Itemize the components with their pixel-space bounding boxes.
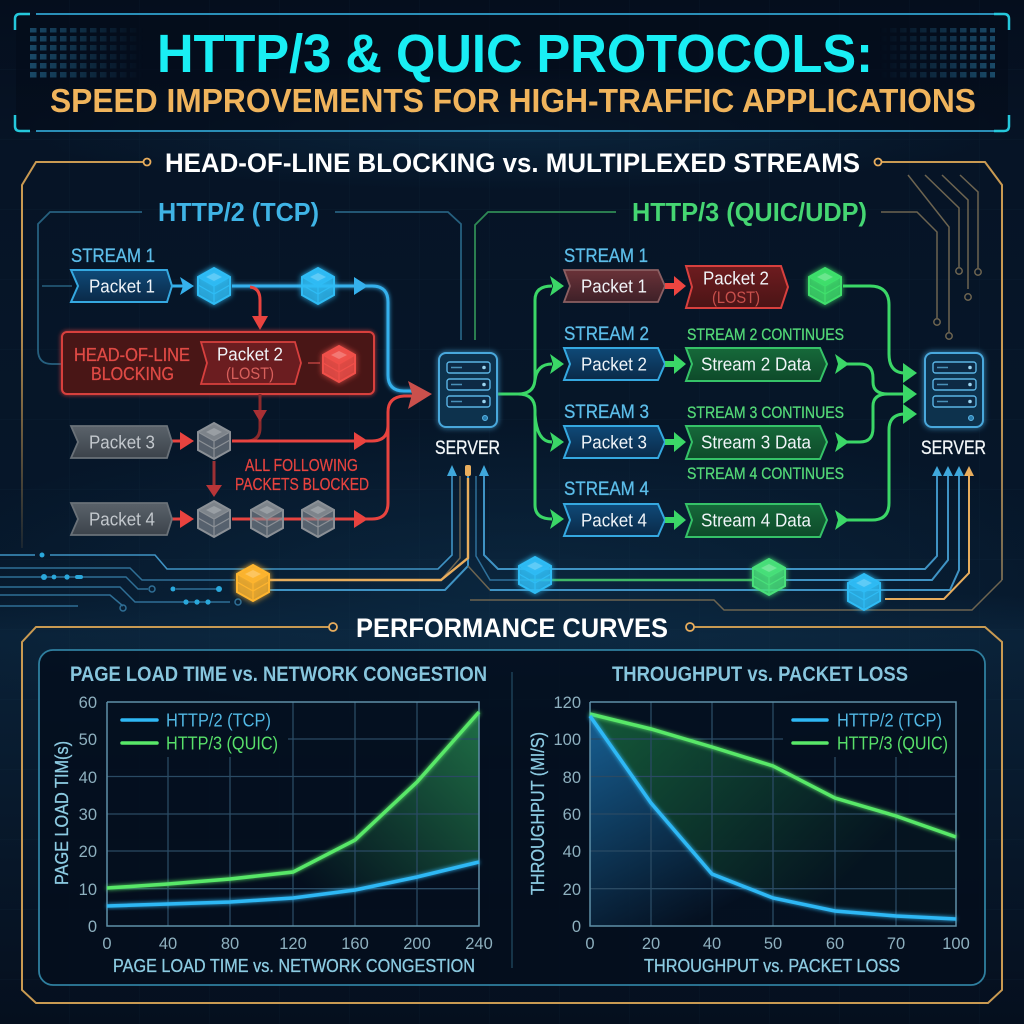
x axis: 70 — [887, 935, 905, 953]
y axis: 20 — [563, 881, 581, 899]
x axis: 200 — [403, 935, 431, 953]
y axis: 0 — [88, 918, 97, 936]
stream labels: STREAM 2 — [564, 324, 649, 345]
x axis: 50 — [764, 935, 782, 953]
right server: SERVER — [921, 438, 986, 459]
y axis — [553, 694, 581, 936]
section frame: performance curves — [22, 613, 1002, 1003]
stream 4 row: STREAM 4 CONTINUES — [687, 465, 844, 483]
flow bus: lower circuit traces — [0, 476, 969, 611]
blocked note: ALL FOLLOWING — [245, 455, 358, 475]
y axis: 30 — [79, 806, 97, 824]
title panel — [15, 14, 1009, 131]
HTTP/2 heading: HTTP/2 (TCP) — [158, 197, 319, 227]
packet 2 lost — [201, 342, 301, 384]
packet 2 lost: (LOST) — [712, 288, 760, 307]
line chart: page load time — [52, 663, 493, 976]
stream 2 row — [564, 326, 844, 381]
stream 2 row: Stream 2 Data — [701, 354, 812, 374]
x axis: 0 — [102, 935, 112, 953]
flow: red packet 4 line — [172, 420, 388, 528]
y axis: 120 — [553, 694, 581, 712]
packet 2 lost — [686, 266, 788, 308]
icon: server right — [925, 353, 983, 427]
stream 3 row: Stream 3 Data — [701, 432, 812, 452]
icon: server left — [439, 353, 497, 427]
icon: gold cube — [237, 565, 269, 601]
icon: red cube — [323, 346, 355, 382]
y axis: 60 — [563, 806, 581, 824]
y axis: 0 — [572, 918, 581, 936]
packet 1 — [71, 270, 172, 302]
stream labels: STREAM 3 — [564, 402, 649, 423]
packet 2 lost: Packet 2 — [217, 344, 283, 364]
HTTP/3 heading: HTTP/3 (QUIC/UDP) — [632, 197, 867, 227]
packet 1 — [564, 270, 665, 302]
packet 4 — [71, 503, 172, 535]
head-of-line blocking box — [62, 332, 374, 394]
blocking label: BLOCKING — [91, 363, 174, 384]
x axis: 120 — [279, 935, 307, 953]
y axis: 40 — [79, 769, 97, 787]
x axis: 40 — [159, 935, 177, 953]
chart panel — [39, 650, 985, 985]
arrow: stream to blocking box — [250, 287, 268, 330]
x axis — [102, 935, 493, 953]
x axis: 40 — [703, 935, 721, 953]
line chart: throughput — [528, 663, 970, 976]
stream 2 row: STREAM 2 CONTINUES — [687, 326, 844, 344]
left server — [435, 353, 500, 459]
section heading: HEAD-OF-LINE BLOCKING vs. MULTIPLEXED STREAMS — [165, 148, 860, 178]
y axis: 80 — [563, 769, 581, 787]
y axis: 60 — [79, 694, 97, 712]
y axis — [79, 694, 97, 936]
stream 4 row: Packet 4 — [581, 510, 647, 530]
stream 1 label: STREAM 1 — [71, 246, 155, 267]
panel: HTTP/3 QUIC — [475, 197, 917, 537]
x axis: 160 — [341, 935, 369, 953]
chart legend: HTTP/2 (TCP) — [166, 710, 271, 730]
right server — [921, 353, 986, 459]
chart legend: HTTP/3 (QUIC) — [837, 732, 948, 754]
y axis title: THROUGHPUT (MI/S) — [528, 732, 548, 895]
y axis: 40 — [563, 843, 581, 861]
packet 3 — [71, 426, 172, 458]
x axis: 240 — [465, 935, 493, 953]
chart legend: HTTP/2 (TCP) — [837, 710, 942, 730]
packet 1: Packet 1 — [581, 276, 647, 296]
icon: bus blue cube right — [848, 574, 880, 610]
stream 4 row — [564, 465, 844, 537]
icon: blue cube 1 — [198, 268, 230, 304]
left server: SERVER — [435, 438, 500, 459]
stream 3 row: STREAM 3 CONTINUES — [687, 404, 844, 422]
x axis: 100 — [942, 935, 970, 953]
chart legend — [793, 710, 948, 754]
performance heading: PERFORMANCE CURVES — [356, 613, 668, 643]
y axis: 20 — [79, 843, 97, 861]
blocked note — [235, 455, 369, 494]
icon: grey cube packet 3 — [198, 423, 230, 459]
section frame: protocol comparison — [22, 148, 1002, 610]
stream labels — [564, 246, 649, 500]
arrow: blocking to packet 3 — [248, 394, 267, 441]
arrow: packet 1 to lost — [665, 276, 686, 296]
y axis: 10 — [79, 881, 97, 899]
y axis: 50 — [79, 731, 97, 749]
chart title: THROUGHPUT vs. PACKET LOSS — [612, 663, 908, 686]
blocking label — [74, 344, 190, 384]
subtitle: SPEED IMPROVEMENTS FOR HIGH-TRAFFIC APPLICATIONS — [50, 83, 976, 120]
packet 1: Packet 1 — [89, 276, 155, 296]
x axis title: PAGE LOAD TIME vs. NETWORK CONGESTION — [113, 956, 475, 976]
blocked note: PACKETS BLOCKED — [235, 474, 369, 494]
packet 2 lost: Packet 2 — [703, 268, 769, 288]
y axis title: PAGE LOAD TIM(s) — [52, 741, 72, 885]
packet 4: Packet 4 — [89, 510, 155, 530]
x axis: 60 — [826, 935, 844, 953]
icon: blue cube 2 — [302, 268, 334, 304]
x axis: 0 — [585, 935, 595, 953]
arrow: packet 3 to packet 4 — [206, 461, 222, 497]
stream 3 row — [564, 404, 844, 459]
chart legend: HTTP/3 (QUIC) — [166, 732, 278, 754]
y axis: 100 — [553, 731, 581, 749]
flow: green fan-out — [498, 276, 564, 529]
icon: green cube — [809, 268, 841, 304]
x axis — [585, 935, 970, 953]
arrow: merged into server — [408, 381, 432, 409]
decorative circuit traces top right — [881, 175, 981, 339]
stream 3 row: Packet 3 — [581, 432, 647, 452]
stream labels: STREAM 4 — [564, 479, 649, 500]
x axis: 20 — [642, 935, 660, 953]
stream 2 row: Packet 2 — [581, 354, 647, 374]
panel: HTTP/2 TCP — [38, 197, 461, 537]
stream labels: STREAM 1 — [564, 246, 648, 267]
x axis title: THROUGHPUT vs. PACKET LOSS — [644, 956, 900, 976]
flow: red packet 3 line — [172, 396, 412, 450]
packet 3: Packet 3 — [89, 432, 155, 452]
arrows up into servers — [447, 465, 974, 476]
x axis: 80 — [221, 935, 239, 953]
chart legend — [122, 710, 278, 754]
icon: bus green cube — [753, 559, 785, 595]
flow: stream data to server — [835, 354, 917, 530]
packet 2 lost: (LOST) — [226, 364, 274, 383]
stream 4 row: Stream 4 Data — [701, 510, 812, 530]
flow: blue stream 1 line — [172, 277, 416, 391]
blocking label: HEAD-OF-LINE — [74, 344, 190, 365]
main title: HTTP/3 & QUIC PROTOCOLS: — [157, 24, 873, 84]
flow: green cube to server — [843, 286, 917, 383]
icon: bus blue cube — [519, 557, 551, 593]
grey cubes packet 4 — [198, 501, 334, 537]
chart title: PAGE LOAD TIME vs. NETWORK CONGESTION — [70, 663, 487, 686]
